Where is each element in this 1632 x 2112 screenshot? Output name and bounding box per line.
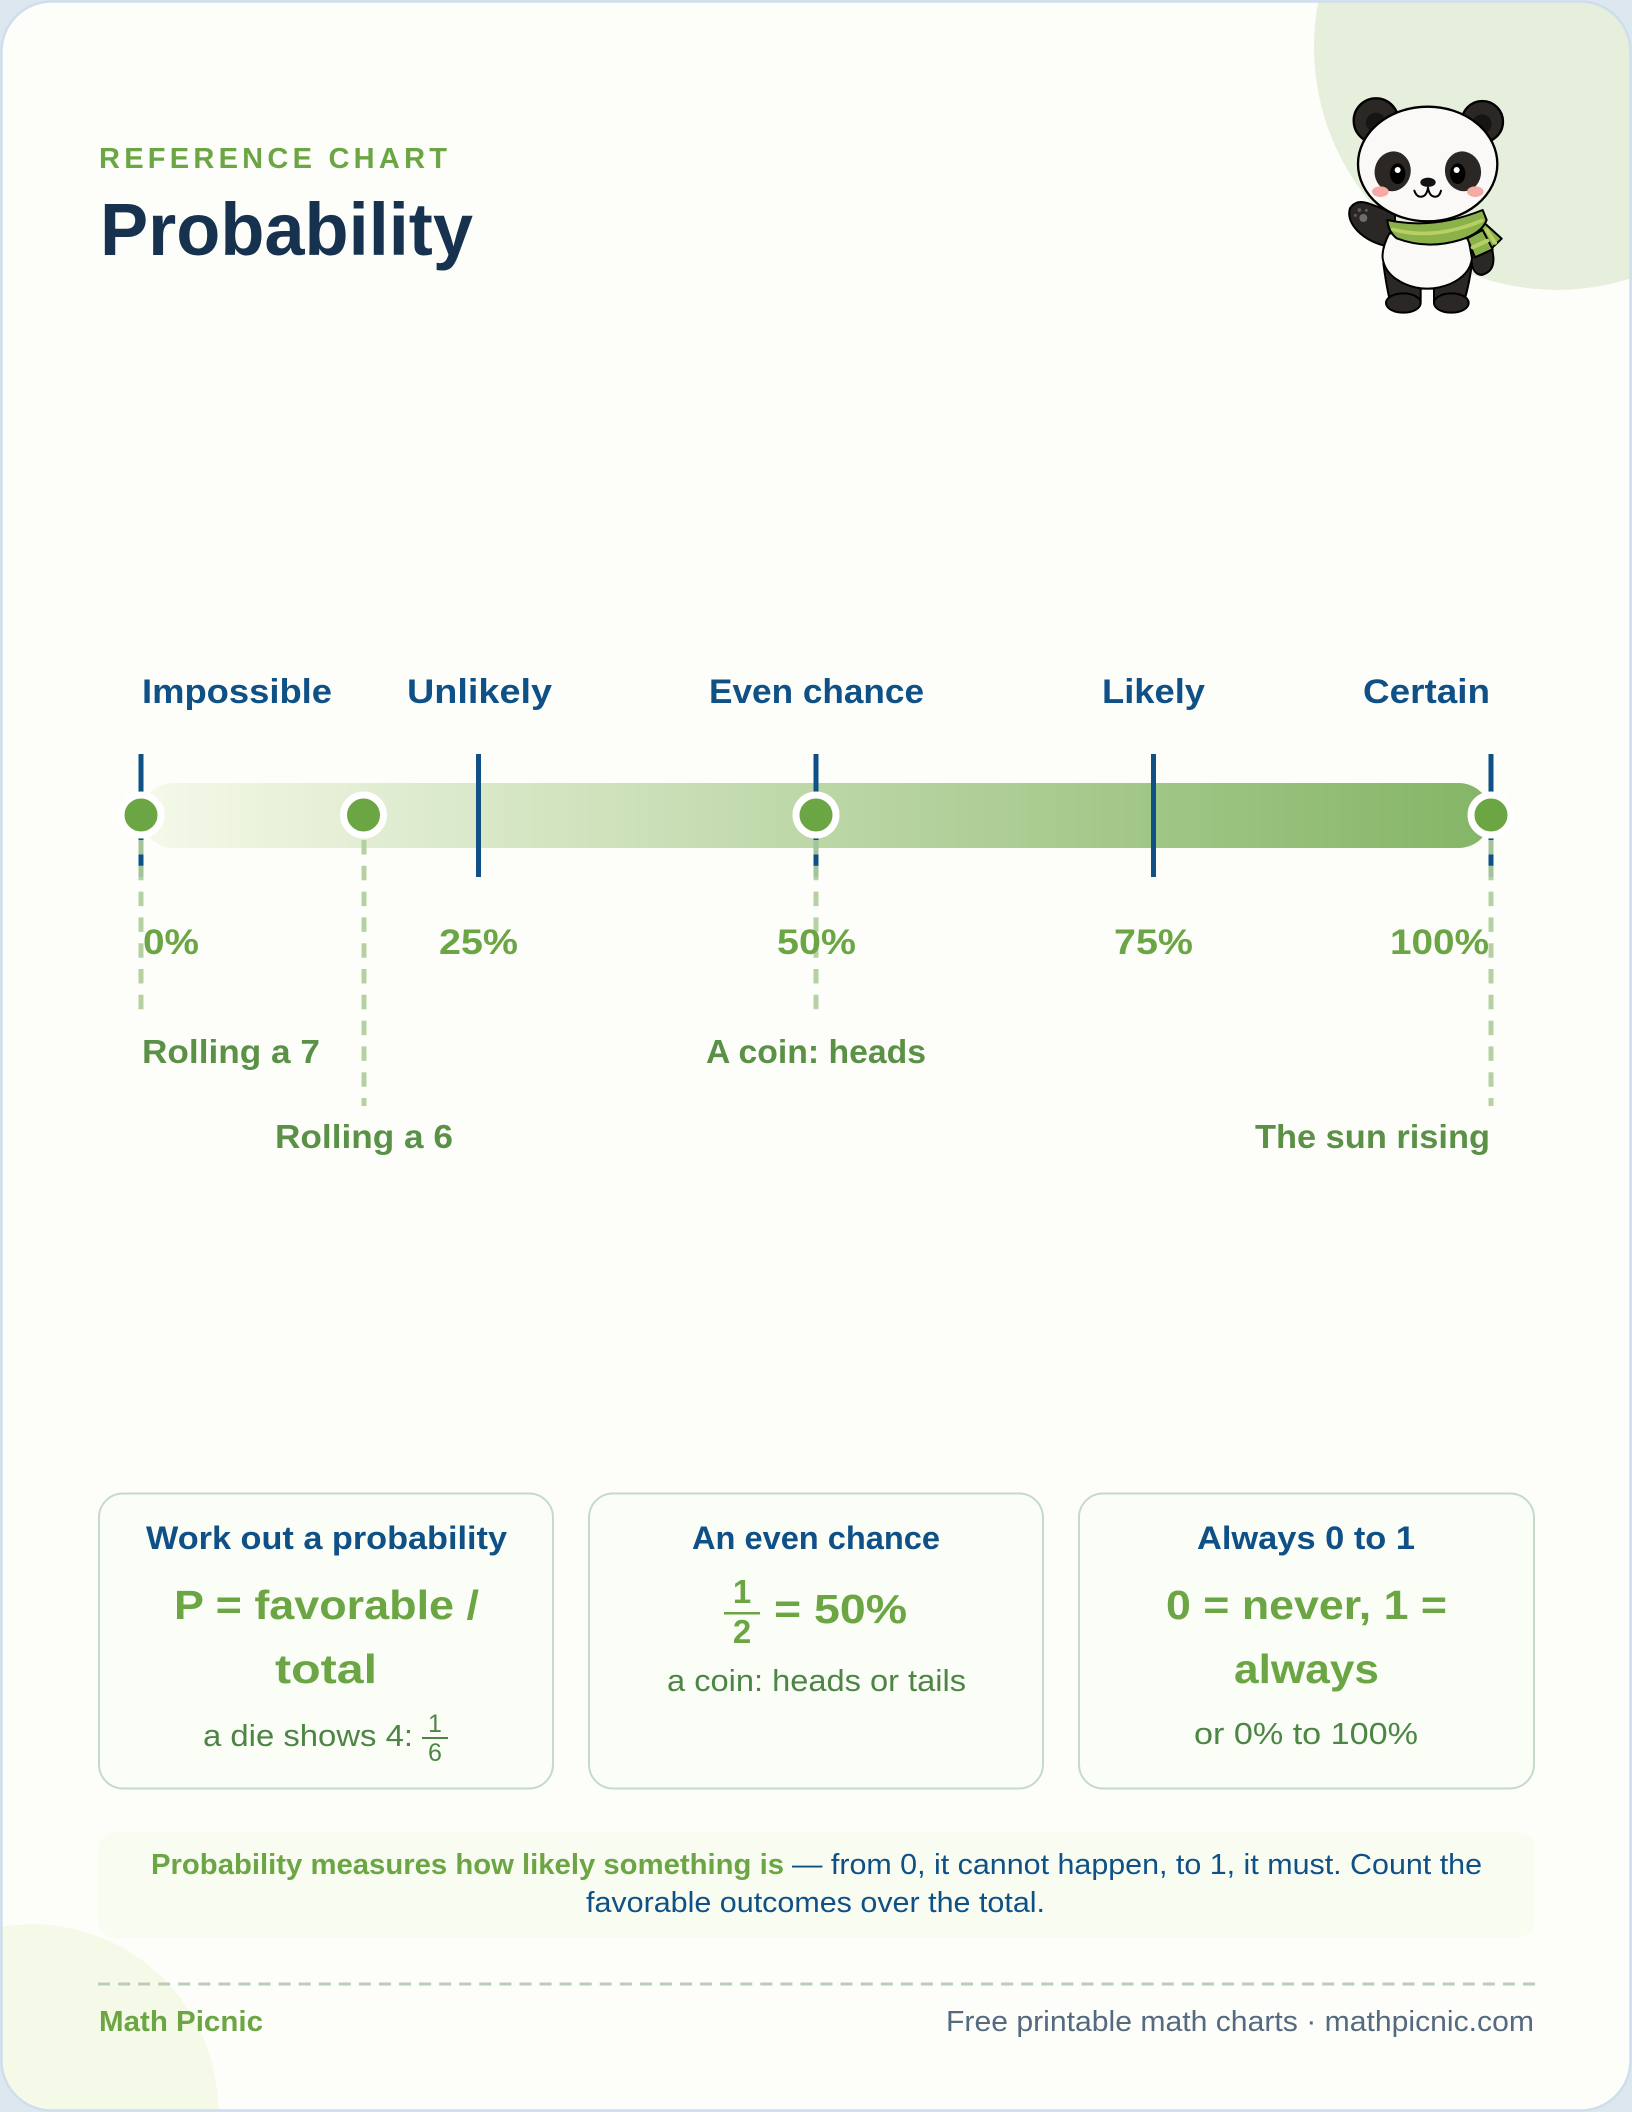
panel: an even chance: a coin: heads or tails <box>667 1663 966 1698</box>
likelihood labels: Unlikely <box>407 673 552 711</box>
panel: work out a probability: total <box>275 1646 377 1692</box>
percent labels: 0% <box>143 923 199 962</box>
panel: work out a probability <box>99 1494 553 1788</box>
percent labels: 75% <box>1114 923 1193 962</box>
panel: work out a probability: P = favorable / <box>174 1582 479 1628</box>
callout: definition note: Probability measures how likely something is <box>151 1849 784 1881</box>
gradient bar <box>141 783 1491 848</box>
panda scarf <box>1387 210 1487 245</box>
panda lower arm <box>1471 245 1493 275</box>
panel: work out a probability: Work out a probability <box>146 1520 507 1556</box>
callout: definition note: — from 0, it cannot happen, to 1, it must. Count the <box>792 1849 1482 1881</box>
panel: work out a probability: 1 <box>428 1710 442 1738</box>
likelihood labels: Certain <box>1363 673 1490 711</box>
footer <box>98 1984 1535 2038</box>
panel: work out a probability: 6 <box>428 1739 442 1767</box>
percent labels: 100% <box>1390 923 1489 962</box>
likelihood labels: Even chance <box>709 673 924 711</box>
panda legs <box>1383 263 1472 313</box>
panel: an even chance <box>589 1494 1043 1788</box>
panel: an even chance: = 50% <box>774 1586 907 1632</box>
scale ticks <box>138 754 1494 877</box>
panda head <box>1358 107 1497 221</box>
panel: an even chance: An even chance <box>692 1520 940 1556</box>
panel: always 0 to 1: 0 = never, 1 = <box>1166 1582 1447 1628</box>
panel: always 0 to 1 <box>1079 1494 1534 1788</box>
footer: Math Picnic <box>99 2006 263 2038</box>
footer: Free printable math charts · mathpicnic.com <box>946 2006 1534 2038</box>
example event labels: Rolling a 7 <box>142 1033 320 1070</box>
panda raised arm <box>1349 202 1395 246</box>
dashed leader lines <box>141 840 1491 1106</box>
event markers <box>121 795 1511 835</box>
percent labels: 25% <box>439 923 518 962</box>
percent labels <box>143 923 1489 962</box>
panel: work out a probability: a die shows 4: <box>203 1718 413 1753</box>
example event labels: The sun rising <box>1255 1118 1490 1155</box>
likelihood labels <box>142 673 1490 711</box>
callout: definition note: favorable outcomes over the total. <box>586 1887 1045 1919</box>
likelihood labels: Likely <box>1102 673 1205 711</box>
title: Probability <box>100 188 473 271</box>
panel: an even chance: 1 <box>733 1573 751 1610</box>
panda ears <box>1354 98 1503 143</box>
probability scale <box>121 754 1511 1106</box>
example event labels: A coin: heads <box>706 1033 926 1070</box>
likelihood labels: Impossible <box>142 673 332 711</box>
panel: always 0 to 1: or 0% to 100% <box>1194 1716 1418 1751</box>
panel: always 0 to 1: always <box>1234 1646 1379 1692</box>
decorative circle: top right <box>1314 0 1632 290</box>
panda scarf tails <box>1467 223 1502 257</box>
example event labels <box>142 1033 1490 1155</box>
callout: definition note <box>98 1832 1535 1938</box>
panel: an even chance: 2 <box>733 1613 751 1650</box>
example event labels: Rolling a 6 <box>275 1118 453 1155</box>
panda belly <box>1383 233 1472 289</box>
panel: always 0 to 1: Always 0 to 1 <box>1197 1520 1415 1556</box>
icon: panda mascot waving with green scarf <box>1349 98 1503 313</box>
percent labels: 50% <box>777 923 856 962</box>
decorative circle: bottom left <box>0 1924 218 2112</box>
eyebrow label: REFERENCE CHART <box>99 143 447 175</box>
